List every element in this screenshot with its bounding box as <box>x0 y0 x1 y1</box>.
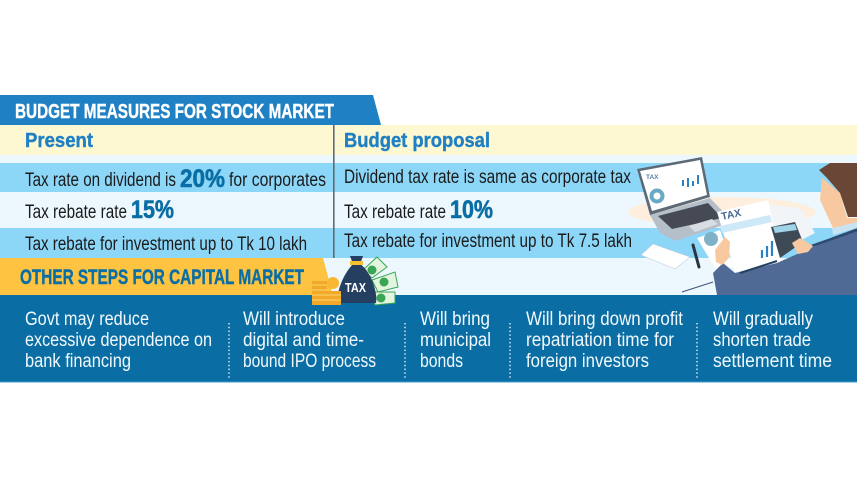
step: bank financing: bank financing <box>25 351 131 372</box>
column: budget proposal <box>344 130 632 252</box>
icon: notepad <box>641 244 690 269</box>
step: bank financing: Govt may reduce <box>25 309 149 330</box>
step: IPO process: digital and time- <box>243 330 364 351</box>
step: IPO process: Will introduce <box>243 309 345 330</box>
section banner: other steps: OTHER STEPS FOR CAPITAL MARKET <box>20 266 304 289</box>
heading: present: Present <box>25 130 93 152</box>
step: municipal bonds <box>420 309 491 372</box>
heading: budget proposal: Budget proposal <box>344 130 490 152</box>
step: profit repatriation: repatriation time for <box>526 330 675 351</box>
step: IPO process <box>243 309 376 372</box>
row: dividend tax present <box>25 165 326 193</box>
row: rebate rate proposal: Tax rebate rate <box>344 202 446 223</box>
icon: tax form <box>697 200 815 272</box>
row: rebate rate present: 15% <box>131 196 174 224</box>
step: settlement time: settlement time <box>713 351 832 372</box>
row: investment proposal: Tax rebate for investment up to Tk 7.5 lakh <box>344 231 632 252</box>
section banner: other steps <box>0 258 333 295</box>
row: rebate rate present <box>25 196 174 224</box>
title banner <box>0 95 381 125</box>
icon: banknotes <box>363 257 398 305</box>
step: IPO process: bound IPO process <box>243 351 376 372</box>
icon: pen <box>693 245 699 267</box>
column: present <box>25 130 326 255</box>
step: settlement time <box>713 309 832 372</box>
row: rebate rate proposal <box>344 196 493 224</box>
row: dividend tax present: for corporates <box>229 170 326 191</box>
icon: tax form: TAX <box>720 207 742 223</box>
icon: tax bag with coins and banknotes <box>312 256 398 305</box>
icon: calculator <box>771 222 803 258</box>
row: investment present: Tax rebate for investment up to Tk 10 lakh <box>25 234 307 255</box>
step: bank financing: excessive dependence on <box>25 330 212 351</box>
panel: comparison table <box>0 125 857 295</box>
row: dividend tax present: 20% <box>180 165 225 193</box>
step: profit repatriation: Will bring down profit <box>526 309 684 330</box>
panel: other steps <box>0 295 857 382</box>
icon: money bag: TAX <box>345 280 366 295</box>
icon: laptop <box>637 157 733 241</box>
step: profit repatriation: foreign investors <box>526 351 649 372</box>
step: settlement time: Will gradually <box>713 309 813 330</box>
title banner: BUDGET MEASURES FOR STOCK MARKET <box>15 101 334 123</box>
icon: laptop: TAX <box>646 174 659 181</box>
illustration: man calculating tax <box>628 157 857 295</box>
step: bank financing <box>25 309 212 372</box>
row: dividend tax present: Tax rate on dividend is <box>25 170 176 191</box>
row: dividend tax proposal: Dividend tax rate is same as corporate tax <box>344 167 631 188</box>
step: profit repatriation <box>526 309 684 372</box>
step: municipal bonds: municipal <box>420 330 491 351</box>
step: municipal bonds: Will bring <box>420 309 490 330</box>
row: rebate rate proposal: 10% <box>450 196 493 224</box>
step: municipal bonds: bonds <box>420 351 463 372</box>
icon: coins <box>312 277 341 305</box>
row: rebate rate present: Tax rebate rate <box>25 202 127 223</box>
shadow: desk <box>628 197 816 227</box>
step: settlement time: shorten trade <box>713 330 811 351</box>
figure: man <box>682 163 857 295</box>
